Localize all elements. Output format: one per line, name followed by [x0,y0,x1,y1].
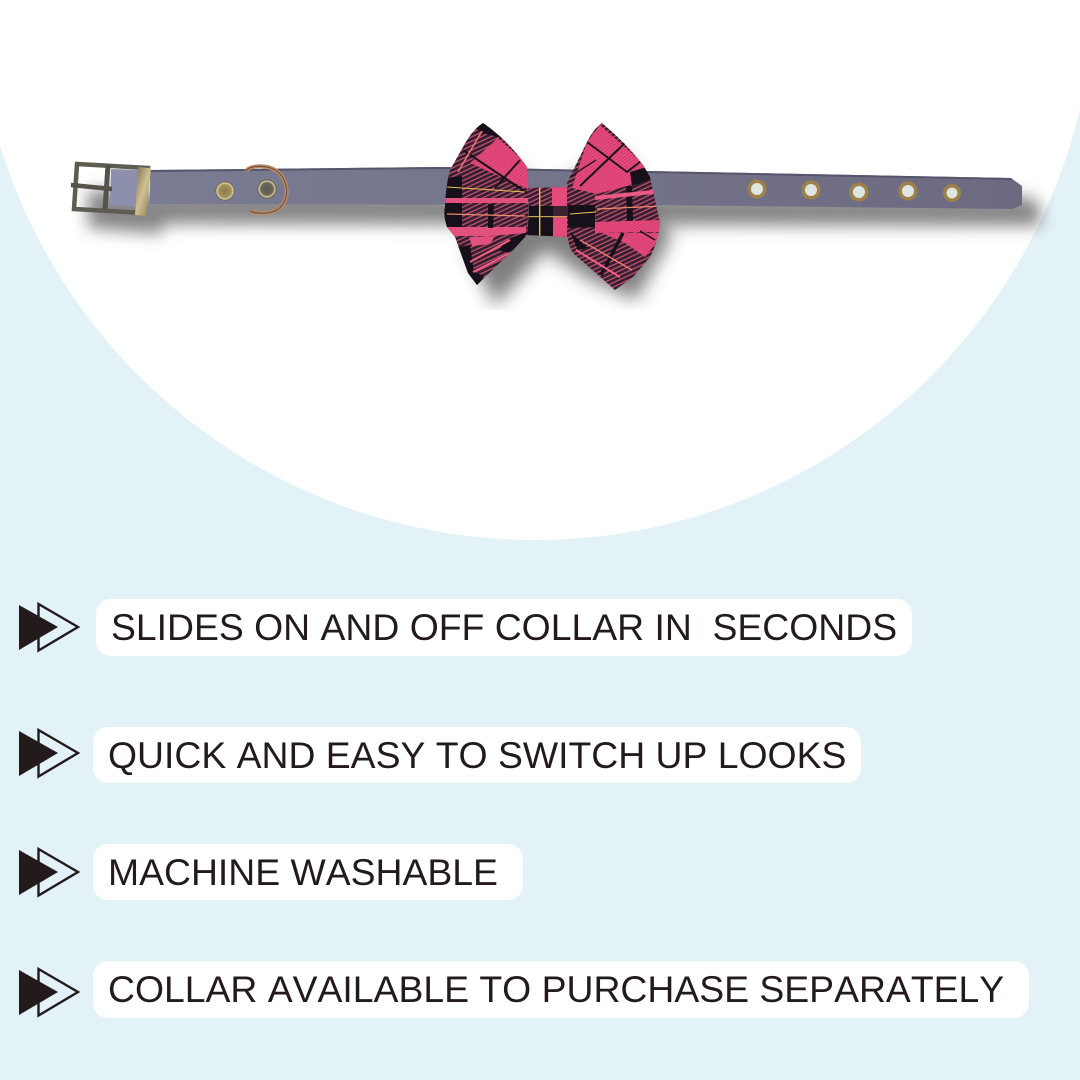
feature row 3: icon [19,846,80,898]
white circle background [0,0,1080,540]
buckle [71,164,151,216]
feature row 4: label: COLLAR AVAILABLE TO PURCHASE SEPARATELY [108,968,1004,1010]
D-ring [246,166,287,213]
collar strap [150,167,1022,209]
collar shadow [88,150,1040,306]
product illustration: circle with collar and bow [0,0,1080,540]
feature row 3: label: MACHINE WASHABLE [108,851,498,893]
feature row 4: icon [19,966,80,1018]
left wing [444,123,528,285]
feature row 1: icon [19,602,80,653]
collar [71,164,1022,216]
plaid bow [440,118,665,293]
feature row 3: label [93,844,523,900]
feature row 1: label: SLIDES ON AND OFF COLLAR IN SECONDS [111,606,897,648]
feature row 2: label: QUICK AND EASY TO SWITCH UP LOOKS [108,734,846,776]
feature row 2: icon [19,728,80,779]
eyelets [749,181,959,200]
rivets [216,180,276,200]
right wing [567,123,660,290]
knot [527,187,568,237]
